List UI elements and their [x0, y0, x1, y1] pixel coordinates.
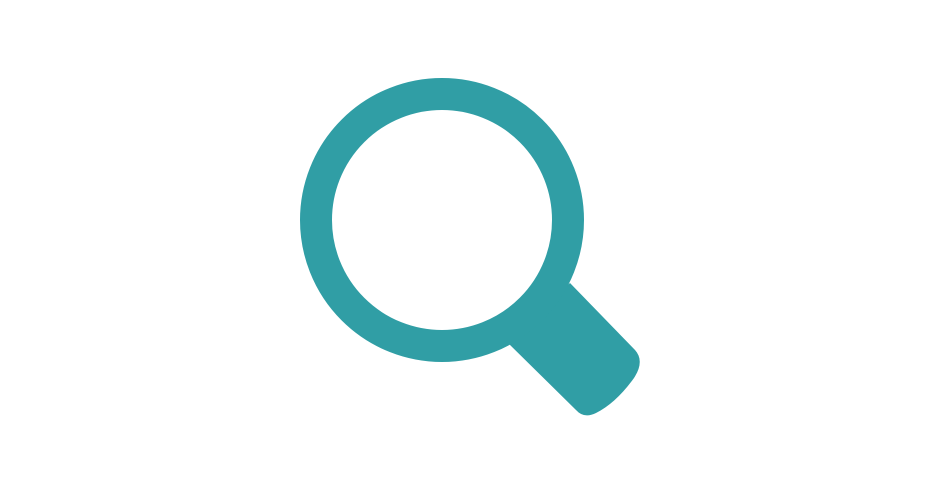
magnifier ring: [316, 94, 568, 346]
magnifier handle: [505, 283, 640, 415]
